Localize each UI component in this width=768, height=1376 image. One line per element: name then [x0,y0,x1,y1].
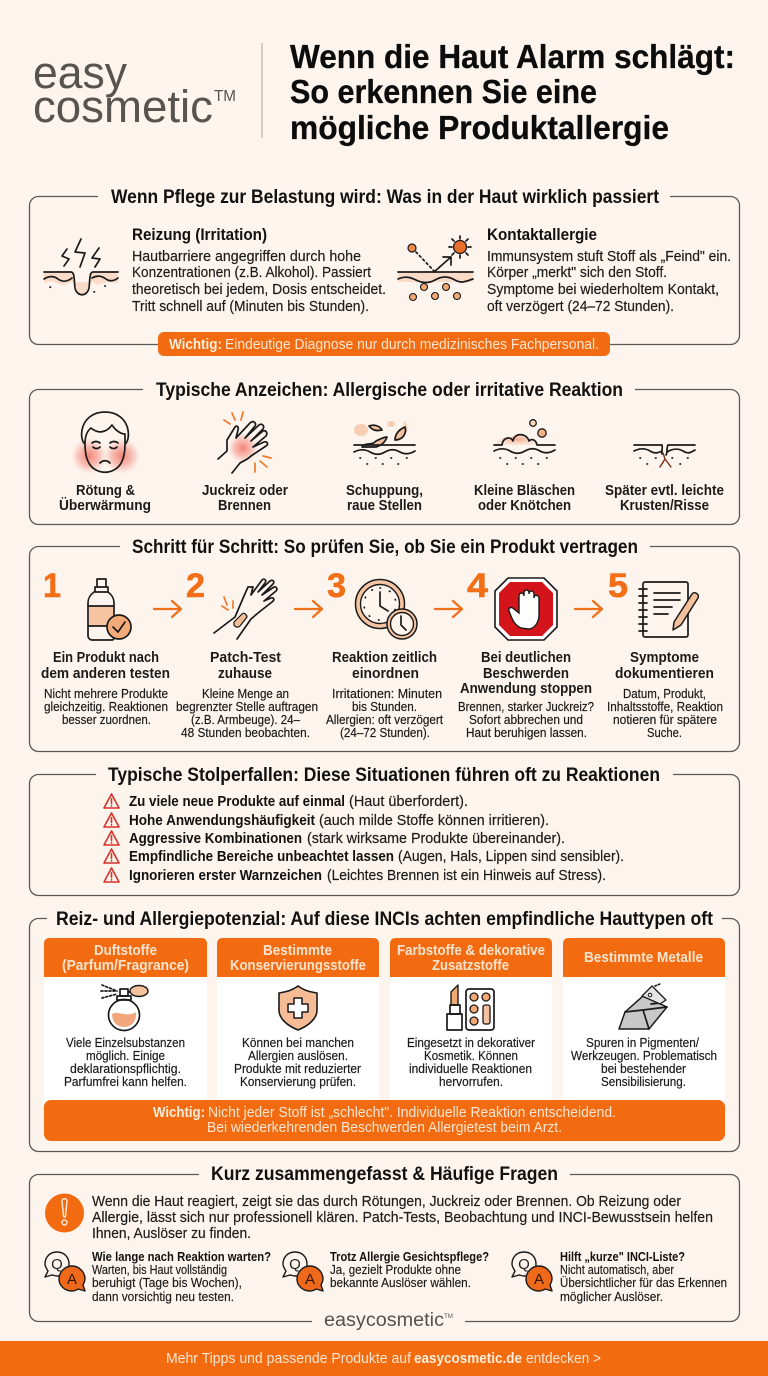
list: (Leichtes Brennen ist ein Hinweis auf Stress). [327,868,606,884]
labels: Juckreiz oder [202,483,288,499]
step 1 text: besser zuordnen. [62,713,151,727]
card: Konservierungsstoffe: Bestimmte [263,943,332,959]
icon: QA 1: A [67,1271,77,1288]
step 1 text: Ein Produkt nach [53,650,159,666]
step 5 text: Symptome [630,650,699,666]
card: Konservierungsstoffe: Können bei manchen [242,1036,354,1050]
logo: cosmetic [33,81,213,132]
step 2 text: 48 Stunden beobachten. [181,726,310,740]
step 4 text [458,650,594,740]
step 3 text: Allergien: oft verzögert [326,713,443,727]
faq 2: Trotz Allergie Gesichtspflege? [330,1250,489,1264]
footer bar [0,1341,768,1376]
card: Farbstoffe: hervorrufen. [439,1075,503,1089]
panel: Schritte [30,536,740,752]
icon: irritation [44,239,118,295]
step 4 text: Anwendung stoppen [460,681,592,697]
step 4 text: Sofort abbrechen und [469,713,583,727]
heading: Wenn Pflege zur Belastung wird: Was in der Haut wirklich passiert [111,186,659,208]
step 4 text: Bei deutlichen [481,650,571,666]
icon: QA 2 [283,1252,323,1291]
step 2 text [176,650,318,740]
summary text: Ihnen, Auslöser zu finden. [92,1226,251,1242]
text: Kontaktallergie [487,226,731,315]
list: (stark wirksame Produkte übereinander). [307,831,565,847]
callout: Wichtig INCI: Bei wiederkehrenden Beschwerden Allergietest beim Arzt. [207,1120,562,1136]
step 1 text: Nicht mehrere Produkte [44,687,168,701]
icon: blisters [494,420,555,464]
callout: Wichtig INCI: Nicht jeder Stoff ist „schlecht". Individuelle Reaktion entscheidend. [208,1105,616,1121]
step numbers: 4 [467,567,488,605]
card: Metalle: Spuren in Pigmenten/ [586,1036,699,1050]
list: Empfindliche Bereiche unbeachtet lassen [129,849,394,865]
logo: easy [33,47,127,98]
labels: Später evtl. leichte [605,483,724,499]
icon: face [71,412,140,474]
card: Konservierungsstoffe [217,938,379,1102]
arrows [154,601,602,617]
text: Reizung: Reizung (Irritation) [132,226,267,244]
icon: QA 3: A [534,1271,544,1288]
step 5 text: Suche. [647,726,682,740]
card: Farbstoffe: Eingesetzt in dekorativer [407,1036,535,1050]
step 3 text: bis Stunden. [352,700,417,714]
summary text: Wenn die Haut reagiert, zeigt sie das durch Rötungen, Juckreiz oder Brennen. Ob Reizung oder [92,1194,681,1210]
icon: lipstick and palette [447,985,494,1030]
icon: QA 3 [512,1252,552,1291]
step 5 text [607,650,723,740]
text: Reizung [132,226,386,315]
panel: Stolperfallen [30,764,740,896]
card: Metalle: Sensibilisierung. [601,1075,686,1089]
text: Kontaktallergie: Körper „merkt" sich den Stoff. [487,265,667,281]
panel: Anzeichen [30,379,740,524]
faq 3 [512,1250,727,1304]
card: Farbstoffe [390,938,552,1102]
card: Duftstoffe [44,938,207,1102]
faq 1: Warten, bis Haut vollständig [92,1263,227,1277]
icon: QA 2: A [305,1271,315,1288]
list: Zu viele neue Produkte auf einmal [129,794,345,810]
card: Farbstoffe: Farbstoffe & dekorative [397,943,545,959]
step 4 text: Brennen, starker Juckreiz? [458,700,594,714]
text: Kontaktallergie: Kontaktallergie [487,226,597,244]
step 2 text: (z.B. Armbeuge). 24– [191,713,300,727]
icon: notebook [639,582,698,637]
faq 1: Wie lange nach Reaktion warten? [92,1250,271,1264]
summary text [92,1194,713,1242]
card: Duftstoffe: möglich. Einige [86,1049,165,1063]
card: Metalle [563,938,725,1102]
labels: Schuppung, [346,483,423,499]
list: Hohe Anwendungshäufigkeit [129,813,315,829]
text: Kontaktallergie: oft verzögert (24–72 Stunden). [487,299,674,315]
step numbers: 3 [327,567,346,605]
step 2 text: Kleine Menge an [202,687,289,701]
icon: patch test [214,579,277,639]
labels: oder Knötchen [478,498,571,514]
callout: Wichtig INCI [44,1100,725,1141]
text: Reizung: Konzentrationen (z.B. Alkohol). Passiert [132,265,371,281]
card: Duftstoffe: Duftstoffe [94,943,157,959]
step 5 text: notieren für spätere [613,713,717,727]
step 3 text: einordnen [352,666,419,682]
warning icons [104,794,119,882]
icon: QA 3: Q [518,1256,530,1273]
faq 1 [45,1250,271,1304]
step 1 text: gleichzeitig. Reaktionen [44,700,168,714]
icon: hand [218,412,271,473]
step 2 text: zuhause [218,666,272,682]
panel: INCI [30,908,740,1152]
faq 1: dann vorsichtig neu testen. [92,1290,234,1304]
icon: metal [619,984,667,1029]
card: Konservierungsstoffe: Konservierungsstoffe [230,958,366,974]
step 3 text: Irritationen: Minuten [332,687,442,701]
card: Metalle: bei bestehender [601,1062,686,1076]
faq 3: möglicher Auslöser. [560,1290,663,1304]
title [290,38,735,146]
step 3 text: Reaktion zeitlich [332,650,437,666]
callout: Wichtig INCI: Wichtig: [153,1105,205,1121]
list: (auch milde Stoffe können irritieren). [319,813,549,829]
panel: Zusammenfassung [30,1163,740,1331]
step numbers: 2 [186,567,205,605]
text: Reizung: Hautbarriere angegriffen durch hohe [132,249,361,265]
card: Farbstoffe: Kosmetik. Können [424,1049,518,1063]
card: Farbstoffe: individuelle Reaktionen [409,1062,532,1076]
text: Kontaktallergie: Immunsystem stuft Stoff als „Feind" ein. [487,249,731,265]
labels: Kleine Bläschen [474,483,575,499]
footer logo: TM [444,1314,453,1320]
icon: bottle [88,579,131,640]
labels [59,483,724,514]
footer bar: easycosmetic.de [414,1351,522,1367]
icon: shield [279,986,317,1030]
footer logo: easycosmetic [324,1310,444,1331]
card: Metalle: Werkzeugen. Problematisch [571,1049,717,1063]
step 2 text: begrenzter Stelle auftragen [176,700,318,714]
labels: Überwärmung [59,497,151,514]
heading: Typische Anzeichen: Allergische oder irritative Reaktion [156,379,623,401]
callout: Wichtig: Eindeutige Diagnose nur durch medizinisches Fachpersonal. [225,337,599,353]
card: Farbstoffe: Zusatzstoffe [432,958,509,974]
labels: Rötung & [76,483,135,499]
faq 2: Ja, gezielt Produkte ohne [330,1263,461,1277]
list: Aggressive Kombinationen [129,831,302,847]
step 4 text: Haut beruhigen lassen. [466,726,587,740]
icon: QA 1 [45,1252,85,1291]
heading: Schritt für Schritt: So prüfen Sie, ob Sie ein Produkt vertragen [132,536,638,558]
title: Wenn die Haut Alarm schlägt: [290,38,735,75]
callout: Wichtig: Wichtig: [169,337,222,353]
labels: Krusten/Risse [620,498,709,514]
card: Duftstoffe: deklarationspflichtig. [70,1062,181,1076]
step 3 text: (24–72 Stunden). [340,726,430,740]
title: So erkennen Sie eine [290,73,597,110]
list: (Augen, Hals, Lippen sind sensibler). [398,849,624,865]
list: Ignorieren erster Warnzeichen [129,868,322,884]
footer bar: entdecken > [526,1351,601,1367]
faq 2 [283,1250,489,1291]
icon: QA 1: Q [51,1256,63,1273]
title: mögliche Produktallergie [290,109,669,146]
faq 2: bekannte Auslöser wählen. [330,1276,471,1290]
step 3 text [326,650,443,740]
icon: flakes [354,421,415,464]
text: Reizung: Tritt schnell auf (Minuten bis Stunden). [132,299,369,315]
step numbers: 5 [608,567,628,605]
text: Reizung: theoretisch bei jedem, Dosis entscheidet. [132,282,386,298]
panel: Belastung [30,186,740,356]
card: Konservierungsstoffe: Konservierung prüfen. [240,1075,356,1089]
card: Konservierungsstoffe: Allergien auslösen. [248,1049,348,1063]
faq 3: Hilft „kurze" INCI-Liste? [560,1250,685,1264]
heading: Kurz zusammengefasst & Häufige Fragen [211,1163,558,1185]
card: Metalle: Bestimmte Metalle [584,950,703,966]
footer bar: Mehr Tipps und passende Produkte auf [166,1351,412,1367]
faq 3: Übersichtlicher für das Erkennen [560,1276,727,1290]
step numbers: 1 [43,567,61,605]
labels: raue Stellen [347,498,422,514]
heading: Typische Stolperfallen: Diese Situationen führen oft zu Reaktionen [108,764,660,786]
summary text: Allergie, lässt sich nur professionell klären. Patch-Tests, Beobachtung und INCI-Bewusstsein helfen [92,1210,713,1226]
faq 3: Nicht automatisch, aber [560,1263,674,1277]
card: Duftstoffe: Parfumfrei kann helfen. [64,1075,187,1089]
logo: TM [214,88,236,105]
list [129,794,624,884]
icon: QA 2: Q [289,1256,301,1273]
icon: stop sign [495,578,557,640]
callout: Wichtig [158,332,610,356]
step 4 text: Beschwerden [483,666,569,682]
icon: cracks [634,445,695,467]
icon: contact allergy [398,236,473,300]
step 5 text: Datum, Produkt, [623,687,706,701]
step 5 text: Inhaltsstoffe, Reaktion [607,700,723,714]
icon: clocks [356,580,417,639]
heading: Reiz- und Allergiepotenzial: Auf diese INCIs achten empfindliche Hauttypen oft [56,908,713,930]
card: Duftstoffe: (Parfum/Fragrance) [62,958,189,974]
step numbers [43,567,628,605]
list: (Haut überfordert). [349,794,468,810]
card: Konservierungsstoffe: Produkte mit reduzierter [234,1062,361,1076]
text: Kontaktallergie: Symptome bei wiederholtem Kontakt, [487,282,719,298]
faq 1: beruhigt (Tage bis Wochen), [92,1276,242,1290]
step 2 text: Patch-Test [210,650,281,666]
logo [33,47,236,132]
labels: Brennen [218,498,271,514]
step 1 text: dem anderen testen [41,666,170,682]
step 1 text [41,650,170,727]
icon: perfume [101,985,148,1030]
card: Duftstoffe: Viele Einzelsubstanzen [66,1036,185,1050]
icon: exclamation [45,1194,84,1232]
header [33,38,735,146]
step 5 text: dokumentieren [615,666,714,682]
